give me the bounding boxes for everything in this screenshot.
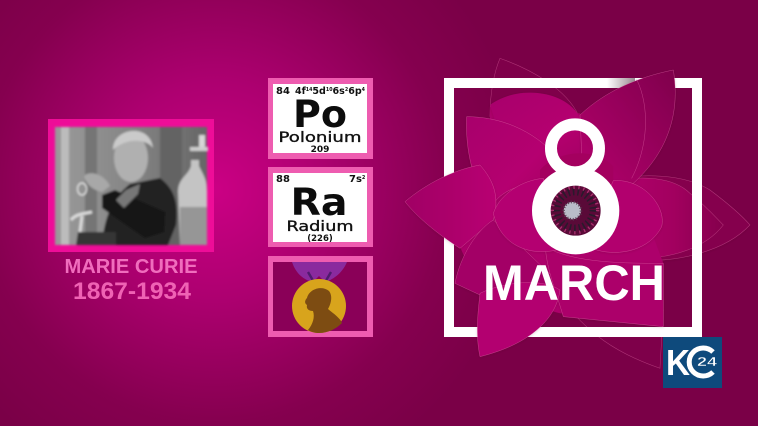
card: Radium: 88 <box>276 174 290 185</box>
dates: 1867-1934: 1867-1934 <box>73 278 192 305</box>
card: Radium: 2 <box>362 175 366 181</box>
card: Polonium: Po <box>293 93 347 136</box>
card: Polonium: 2 <box>345 87 349 93</box>
icon: medal portrait <box>305 288 342 333</box>
card: Polonium: 5d <box>312 86 326 97</box>
panel: portrait of Marie Curie <box>48 119 214 305</box>
card: Radium: (226) <box>307 234 333 244</box>
card: Polonium: 6p <box>348 86 362 97</box>
card: Nobel medal <box>268 256 373 337</box>
logo: K24: 24 <box>697 354 718 369</box>
frame shadow <box>607 78 635 88</box>
flower centre texture <box>549 184 601 236</box>
card: Radium: 7s <box>349 174 362 185</box>
card: Polonium <box>268 78 373 159</box>
card: Polonium: 10 <box>326 87 333 93</box>
icon: ribbon <box>292 262 347 282</box>
icon: gold medal <box>292 279 346 333</box>
white square frame <box>449 83 697 332</box>
logo: K24: K <box>666 342 690 383</box>
card: Polonium: 4 <box>362 87 365 93</box>
flower: front petals <box>405 70 675 357</box>
card: Radium: Radium <box>286 219 354 235</box>
card: Polonium: 14 <box>306 87 313 93</box>
card: Radium <box>268 167 373 247</box>
logo: K24 <box>663 337 722 388</box>
text: MARCH: MARCH <box>483 254 665 311</box>
card: Polonium: 6s <box>333 86 345 97</box>
card: Radium: Ra <box>290 181 348 224</box>
photo frame <box>48 119 214 252</box>
card: Polonium: 84 <box>276 86 290 97</box>
card: Polonium: Polonium <box>278 130 362 146</box>
card: Polonium: 209 <box>311 145 329 155</box>
photograph <box>55 127 208 245</box>
card: Polonium: 4f <box>295 86 306 97</box>
flower: rear petals <box>490 58 750 368</box>
panel: 8 March flower <box>405 58 750 368</box>
name: Marie Curie: MARIE CURIE <box>64 256 198 278</box>
numeral 8 <box>541 124 610 245</box>
